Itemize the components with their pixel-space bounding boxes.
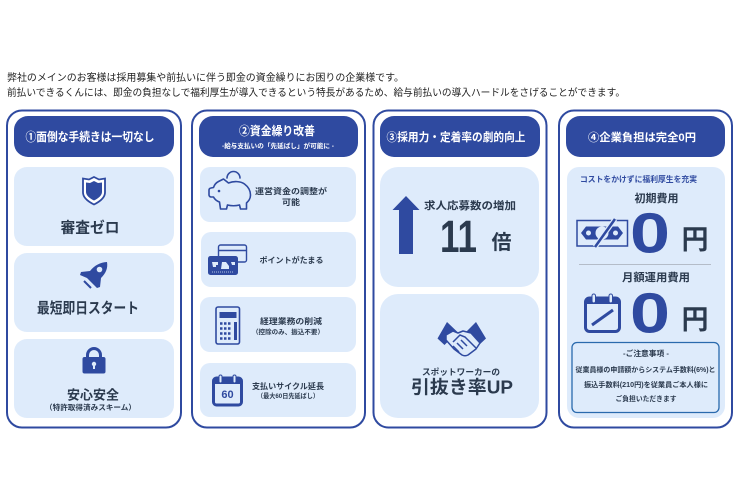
- icon: cards: [208, 245, 246, 275]
- card: costs: [567, 167, 725, 418]
- card: accounting: 経理業務の削減: [260, 316, 322, 326]
- zero yen monthly: 円: [682, 305, 708, 335]
- card: costs: 初期費用: [634, 191, 678, 205]
- card: working capital: [200, 167, 356, 222]
- card: no screening: [14, 167, 174, 246]
- card: working capital: 可能: [282, 197, 300, 207]
- notes box: 振込手数料(210円)を従業員ご本人様に: [584, 380, 708, 389]
- card: no screening: 審査ゼロ: [60, 218, 120, 236]
- zero yen initial: 円: [682, 225, 708, 255]
- card: poaching: スポットワーカーの: [422, 367, 500, 377]
- notes box: -ご注意事項 -: [623, 348, 670, 358]
- intro text: [7, 71, 625, 99]
- header 2: -給与支払いの「先延ばし」が可能に -: [222, 141, 334, 150]
- card: costs: 月額運用費用: [622, 270, 690, 284]
- icon: calculator: [216, 307, 240, 344]
- card: applicants: 倍: [492, 231, 512, 254]
- card: costs: コストをかけずに福利厚生を充実: [580, 174, 697, 184]
- header 3: ③採用力・定着率の劇的向上: [386, 130, 526, 144]
- icon: up arrow: [392, 196, 420, 254]
- card: safe: （特許取得済みスキーム）: [45, 402, 136, 412]
- header 3: [380, 116, 540, 157]
- card: applicants: 11: [440, 211, 477, 262]
- zero yen initial: [630, 202, 708, 266]
- header 4: ④企業負担は完全0円: [588, 130, 696, 144]
- card: payment cycle: [200, 363, 356, 417]
- card: safe: [14, 339, 174, 418]
- header 2: ②資金繰り改善: [239, 123, 315, 138]
- panel 3: recruiting: [374, 110, 546, 428]
- zero yen monthly: 0: [630, 282, 670, 346]
- card: applicants: [380, 167, 539, 287]
- card: applicants: 求人応募数の増加: [424, 199, 516, 212]
- card: same-day start: [14, 253, 174, 332]
- intro text: 前払いできるくんには、即金の負担なしで福利厚生が導入できるという特長があるため、給与前払いの導入ハードルをさげることができます。: [7, 86, 625, 99]
- icon: piggy bank: [209, 172, 250, 209]
- card: same-day start: 最短即日スタート: [37, 299, 139, 317]
- intro text: 弊社のメインのお客様は採用募集や前払いに伴う即金の資金繰りにお困りの企業様です。: [7, 71, 404, 84]
- card: payment cycle: 支払いサイクル延長: [252, 381, 324, 391]
- card: safe: 安心安全: [67, 388, 119, 402]
- card: points: [201, 232, 356, 287]
- icon: padlock: [82, 348, 106, 374]
- header 4: [566, 116, 725, 157]
- notes box: 従業員様の申請額からシステム手数料(6%)と: [576, 365, 716, 374]
- icon: calendar 60: [214, 375, 242, 405]
- zero yen initial: 0: [630, 202, 670, 266]
- zero yen monthly: [630, 282, 708, 346]
- header 2: [199, 116, 358, 157]
- card: accounting: （控除のみ、振込不要）: [252, 327, 324, 336]
- card: accounting: [200, 297, 356, 352]
- icon: shield: [83, 177, 105, 204]
- panel 4: zero cost: [559, 110, 732, 428]
- card: payment cycle: （最大60日先延ばし）: [257, 391, 319, 400]
- header 1: ①面倒な手続きは一切なし: [26, 129, 154, 144]
- notes box: [572, 342, 719, 412]
- icon: calendar 60: 60: [221, 389, 234, 401]
- icon: handshake: [438, 322, 486, 356]
- header 1: [14, 116, 174, 157]
- panel 1: no paperwork: [7, 110, 181, 428]
- icon: crossed calendar: [586, 294, 620, 332]
- card: working capital: 運営資金の調整が: [255, 186, 327, 196]
- notes box: ご負担いただきます: [616, 394, 676, 403]
- card: poaching: [380, 294, 539, 418]
- icon: crossed banknote: [577, 219, 628, 247]
- icon: rocket: [80, 262, 107, 288]
- panel 2: cash flow: [192, 110, 365, 428]
- card: points: ポイントがたまる: [260, 255, 324, 265]
- card: poaching: 引抜き率UP: [411, 378, 513, 398]
